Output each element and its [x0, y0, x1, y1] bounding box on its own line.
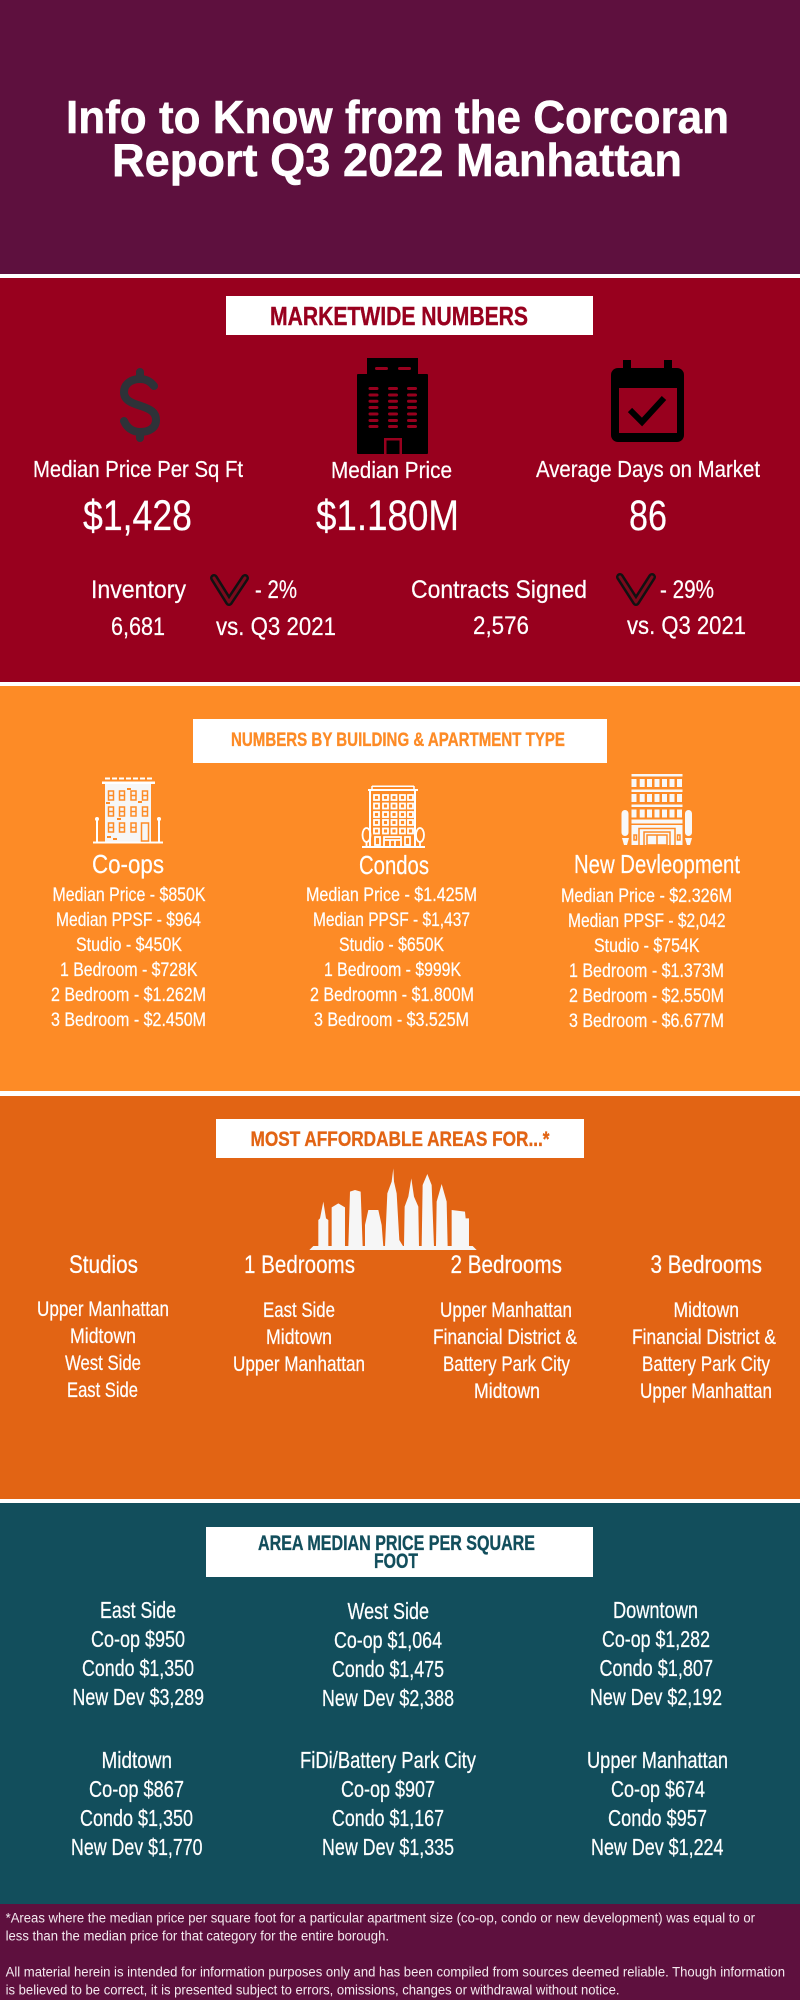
text block: fidi and battery park city: Co-op $907: [341, 1776, 435, 1802]
text block: downtown: Downtown: [613, 1597, 698, 1623]
text block: west side: Co-op $1,064: [334, 1627, 442, 1653]
panel: title header: [0, 0, 800, 274]
text block: co-ops: Median Price - $850K: [52, 885, 206, 906]
text block: studios: [37, 1251, 169, 1402]
text block: footnote: less than the median price for that category for the entire borough.: [6, 1928, 389, 1944]
text block: west side: West Side: [348, 1598, 429, 1624]
title: Report Q3 2022 Manhattan: [112, 134, 682, 186]
heading: area median price per square foot: [206, 1527, 593, 1577]
text block: footnote: *Areas where the median price per square foot for a particular apartment size (co-op, condo or new development) was equal to or: [6, 1910, 755, 1926]
text block: 1 bedrooms: East Side: [263, 1299, 335, 1322]
text block: disclaimer: All material herein is intended for information purposes only and has been compiled from sources deemed reliable. Though information: [6, 1964, 785, 1980]
stat: inventory: vs. Q3 2021: [216, 613, 336, 641]
text block: 3 bedrooms: Midtown: [674, 1299, 739, 1322]
text block: midtown: New Dev $1,770: [71, 1834, 202, 1860]
text block: co-ops: Studio - $450K: [76, 935, 182, 956]
panel: marketwide numbers: [0, 278, 800, 682]
text block: studios: East Side: [67, 1379, 138, 1402]
text block: co-ops: 3 Bedroom - $2.450M: [51, 1010, 206, 1031]
panel: numbers by building and apartment type: [0, 686, 800, 1091]
text block: downtown: Co-op $1,282: [602, 1626, 710, 1652]
text block: west side: New Dev $2,388: [322, 1685, 454, 1711]
heading: marketwide numbers: MARKETWIDE NUMBERS: [270, 301, 528, 331]
text block: fidi and battery park city: FiDi/Battery Park City: [300, 1747, 476, 1773]
stat: median price per sq ft: [33, 456, 244, 540]
text block: new development: [561, 849, 741, 1032]
text block: 1 bedrooms: Upper Manhattan: [233, 1353, 365, 1376]
text block: 3 bedrooms: Battery Park City: [642, 1353, 770, 1376]
stat: contracts signed: - 29%: [660, 576, 714, 604]
text block: studios: West Side: [65, 1352, 141, 1375]
title: Info to Know from the Corcoran: [66, 91, 729, 143]
panel: area median price per square foot: [0, 1503, 800, 1904]
text block: new development: New Devleopment: [574, 849, 741, 879]
text block: condos: [306, 850, 477, 1031]
text block: midtown: Midtown: [102, 1747, 172, 1773]
text block: condos: 3 Bedroom - $3.525M: [314, 1010, 469, 1031]
text block: new development: Median PPSF - $2,042: [568, 911, 726, 932]
stat: inventory: - 2%: [255, 576, 297, 604]
icon: condo building: [362, 786, 425, 848]
text block: 3 bedrooms: Upper Manhattan: [640, 1380, 772, 1403]
text block: east side: East Side: [100, 1597, 176, 1623]
heading: numbers by building: NUMBERS BY BUILDING & APARTMENT TYPE: [231, 730, 565, 751]
text block: 2 bedrooms: [433, 1251, 577, 1403]
icon: co-op building: [93, 778, 163, 844]
title: [66, 91, 729, 186]
text block: condos: 2 Bedroomn - $1.800M: [310, 985, 474, 1006]
text block: east side: New Dev $3,289: [72, 1684, 204, 1710]
text block: midtown: [71, 1747, 202, 1860]
text block: footnote: [6, 1910, 755, 1944]
text block: 1 bedrooms: Midtown: [266, 1326, 332, 1349]
stat: average days on market: 86: [629, 492, 667, 540]
stat: inventory: [91, 576, 336, 641]
text block: new development: 3 Bedroom - $6.677M: [569, 1011, 724, 1032]
text block: new development: 2 Bedroom - $2.550M: [569, 986, 724, 1007]
text block: co-ops: [51, 849, 206, 1031]
text block: east side: Co-op $950: [91, 1626, 185, 1652]
stat: median price: [316, 457, 459, 540]
text block: disclaimer: is believed to be correct, it is presented subject to errors, omissions, changes or withdrawal without notice.: [6, 1982, 620, 1998]
text block: condos: 1 Bedroom - $999K: [324, 960, 461, 981]
text block: studios: Midtown: [70, 1325, 136, 1348]
stat: average days on market: Average Days on Market: [536, 456, 761, 482]
heading: marketwide numbers: [226, 296, 593, 335]
text block: 2 bedrooms: Battery Park City: [443, 1353, 570, 1376]
stat: median price: $1.180M: [316, 492, 459, 540]
heading: most affordable areas: [216, 1119, 584, 1158]
icon: new development building: [622, 774, 692, 845]
text block: fidi and battery park city: [300, 1747, 476, 1860]
text block: 3 bedrooms: 3 Bedrooms: [650, 1251, 762, 1279]
text block: 2 bedrooms: 2 Bedrooms: [450, 1251, 562, 1279]
panel: footer disclaimer: [0, 1904, 800, 2000]
panel: most affordable areas: [0, 1096, 800, 1499]
text block: co-ops: Median PPSF - $964: [56, 910, 201, 931]
text block: west side: Condo $1,475: [332, 1656, 444, 1682]
text block: condos: Studio - $650K: [339, 935, 444, 956]
text block: upper manhattan: Upper Manhattan: [587, 1747, 728, 1773]
stat: contracts signed: vs. Q3 2021: [627, 612, 746, 640]
text block: 3 bedrooms: [632, 1251, 776, 1403]
text block: condos: Median PPSF - $1,437: [313, 910, 470, 931]
stat: contracts signed: 2,576: [473, 612, 529, 640]
text block: upper manhattan: Co-op $674: [611, 1776, 705, 1802]
heading: area median price per square foot: FOOT: [374, 1550, 418, 1573]
stat: average days on market: [536, 456, 761, 540]
icon: dollar sign: [124, 372, 156, 438]
stat: median price: Median Price: [331, 457, 452, 483]
text block: fidi and battery park city: New Dev $1,335: [322, 1834, 454, 1860]
stat: median price per sq ft: $1,428: [83, 492, 192, 540]
text block: downtown: Condo $1,807: [600, 1655, 713, 1681]
stat: inventory: Inventory: [91, 576, 186, 604]
text block: east side: [72, 1597, 204, 1710]
text block: 2 bedrooms: Financial District &: [433, 1326, 577, 1349]
heading: most affordable areas: MOST AFFORDABLE AREAS FOR...*: [250, 1128, 550, 1151]
text block: 1 bedrooms: [233, 1251, 365, 1376]
text block: new development: 1 Bedroom - $1.373M: [569, 961, 724, 982]
text block: co-ops: 2 Bedroom - $1.262M: [51, 985, 206, 1006]
stat: inventory: 6,681: [111, 613, 165, 641]
icon: down chevron: [214, 578, 245, 602]
text block: west side: [322, 1598, 454, 1711]
icon: calendar with check: [611, 360, 684, 442]
text block: co-ops: Co-ops: [92, 849, 164, 879]
icon: office building: [357, 358, 428, 454]
heading: area median price per square foot: AREA MEDIAN PRICE PER SQUARE: [258, 1532, 535, 1555]
text block: midtown: Condo $1,350: [80, 1805, 193, 1831]
text block: co-ops: 1 Bedroom - $728K: [60, 960, 198, 981]
stat: median price per sq ft: Median Price Per Sq Ft: [33, 456, 244, 482]
heading: numbers by building: [193, 719, 607, 763]
text block: 1 bedrooms: 1 Bedrooms: [244, 1251, 355, 1279]
icon: down chevron: [620, 577, 652, 602]
text block: upper manhattan: [587, 1747, 728, 1860]
text block: downtown: [590, 1597, 722, 1710]
text block: disclaimer: [6, 1964, 785, 1998]
text block: 2 bedrooms: Upper Manhattan: [440, 1299, 572, 1322]
icon: city skyline: [309, 1168, 477, 1250]
text block: condos: Median Price - $1.425M: [306, 885, 477, 906]
stat: contracts signed: Contracts Signed: [411, 576, 587, 604]
text block: midtown: Co-op $867: [89, 1776, 184, 1802]
text block: studios: Studios: [69, 1251, 138, 1279]
text block: condos: Condos: [359, 850, 429, 880]
text block: fidi and battery park city: Condo $1,167: [332, 1805, 444, 1831]
stat: contracts signed: [411, 576, 746, 640]
text block: upper manhattan: Condo $957: [608, 1805, 707, 1831]
text block: studios: Upper Manhattan: [37, 1298, 169, 1321]
text block: 2 bedrooms: Midtown: [474, 1380, 540, 1403]
text block: new development: Median Price - $2.326M: [561, 886, 732, 907]
text block: upper manhattan: New Dev $1,224: [591, 1834, 724, 1860]
text block: downtown: New Dev $2,192: [590, 1684, 722, 1710]
text block: east side: Condo $1,350: [82, 1655, 194, 1681]
text block: new development: Studio - $754K: [594, 936, 700, 957]
